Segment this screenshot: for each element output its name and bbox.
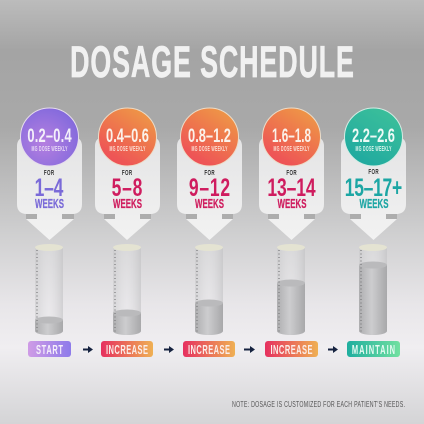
- label: increase: [101, 341, 153, 358]
- cylinder 1: [35, 244, 63, 335]
- dose range: 2.2–2.6: [352, 124, 395, 147]
- label: increase: [183, 341, 235, 358]
- dose circle: [98, 108, 156, 166]
- label: maintain: [347, 341, 400, 358]
- label: increase: INCREASE: [188, 344, 230, 358]
- panel: step 1 start: [17, 108, 82, 240]
- for label: FOR: [368, 168, 379, 176]
- label: increase: INCREASE: [106, 344, 148, 358]
- panel: step 4 increase: [259, 108, 324, 240]
- dose unit: MG DOSE WEEKLY: [274, 146, 310, 154]
- arrow: [164, 346, 174, 353]
- stem shadow: [186, 214, 233, 219]
- week range: 5–8: [112, 173, 142, 202]
- card shape: [177, 137, 242, 240]
- card shape: [17, 137, 82, 240]
- card shape: [95, 137, 160, 240]
- title: DOSAGE SCHEDULE: [70, 37, 354, 87]
- dose range: 1.6–1.8: [272, 125, 311, 147]
- weeks label: WEEKS: [113, 198, 142, 212]
- footnote: NOTE: DOSAGE IS CUSTOMIZED FOR EACH PATIENT'S NEEDS.: [232, 401, 405, 409]
- label: start: START: [36, 344, 64, 358]
- label: increase: INCREASE: [270, 344, 313, 358]
- cylinder 2: [113, 244, 141, 335]
- card shape: [259, 137, 324, 240]
- dose unit: MG DOSE WEEKLY: [192, 146, 228, 154]
- dose range: 0.2–0.4: [27, 124, 72, 147]
- label: maintain: MAINTAIN: [352, 344, 395, 358]
- week range: 9–12: [189, 173, 230, 202]
- label: increase: [265, 341, 318, 358]
- stem shadow: [104, 214, 151, 219]
- for label: FOR: [122, 169, 132, 177]
- panel: step 3 increase: [177, 108, 242, 240]
- week range: 1–4: [35, 173, 63, 202]
- panel: step 5 maintain: [341, 108, 406, 240]
- weeks label: WEEKS: [35, 198, 64, 212]
- card shape: [341, 137, 406, 240]
- panel: step 2 increase: [95, 108, 160, 240]
- stem shadow: [268, 214, 315, 219]
- dose circle: [344, 108, 402, 166]
- dose circle: [262, 108, 320, 166]
- cylinder 4: [277, 244, 305, 335]
- weeks label: WEEKS: [195, 198, 224, 212]
- weeks label: WEEKS: [360, 198, 389, 212]
- for label: FOR: [204, 169, 215, 177]
- stem shadow: [26, 214, 74, 219]
- dose unit: MG DOSE WEEKLY: [356, 146, 392, 154]
- dose circle: [20, 108, 78, 166]
- dose range: 0.4–0.6: [106, 124, 149, 147]
- label: start: [28, 341, 71, 358]
- arrow: [83, 346, 93, 353]
- dose unit: MG DOSE WEEKLY: [32, 146, 68, 154]
- stem shadow: [350, 214, 397, 219]
- week range: 13–14: [267, 173, 316, 202]
- cylinder 5: [359, 244, 387, 335]
- dose unit: MG DOSE WEEKLY: [110, 146, 146, 154]
- dose range: 0.8–1.2: [188, 124, 231, 147]
- for label: FOR: [286, 169, 297, 177]
- arrow: [328, 346, 338, 353]
- dose circle: [180, 108, 238, 166]
- week range: 15–17+: [345, 173, 402, 202]
- weeks label: WEEKS: [278, 198, 307, 212]
- arrow: [244, 346, 255, 353]
- for label: FOR: [44, 169, 54, 177]
- cylinder 3: [195, 244, 223, 335]
